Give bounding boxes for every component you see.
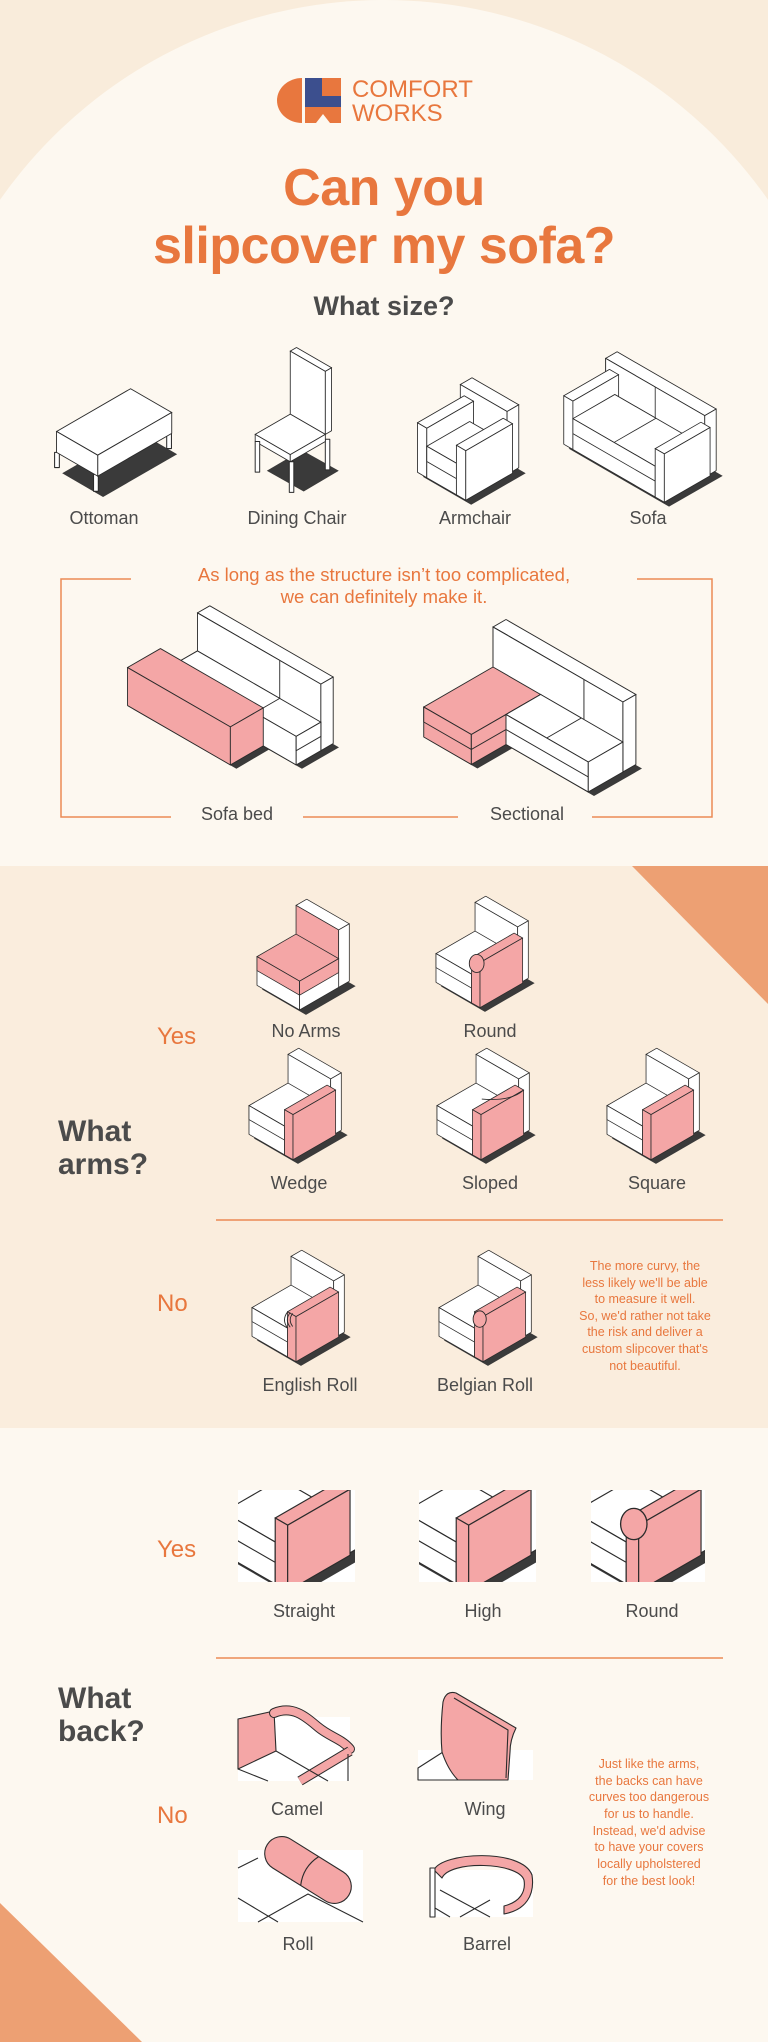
labels: no arms, round: No Arms [271,1021,341,1041]
note: curvy arms: the risk and deliver a [587,1325,703,1339]
note: curvy backs: for the best look! [603,1874,695,1888]
icon: armchair [417,378,526,505]
note: curvy backs: for us to handle. [604,1807,694,1821]
icon: dining chair [255,348,339,492]
labels: sizes: Sofa [629,508,668,528]
icon: camel back [238,1710,350,1781]
callout text [198,564,570,607]
heading: what arms: arms? [58,1148,148,1181]
icon: english roll [252,1250,351,1366]
note: curvy backs: Instead, we'd advise [593,1824,705,1838]
icon: round arm [436,896,535,1012]
note: curvy backs: the backs can have [595,1774,703,1788]
logo: COMFORT [352,76,473,103]
icon: straight back [238,1490,355,1582]
heading: what arms: What [58,1115,131,1148]
labels: sofa bed & sectional [201,804,564,824]
note: curvy arms: So, we'd rather not take [579,1309,711,1323]
labels: english roll, belgian roll [262,1375,533,1395]
heading: what back: What [58,1682,131,1715]
background: back section [0,1428,768,2042]
labels: english roll, belgian roll: English Roll [262,1375,358,1395]
note: curvy backs: to have your covers [594,1840,704,1854]
icon: ottoman [55,389,177,497]
heading: what size: What size? [313,291,455,321]
icon: sofa bed [128,606,339,769]
logo [277,76,473,127]
icon: sloped arm [437,1048,536,1164]
labels: sofa bed & sectional: Sectional [490,804,564,824]
icon: sofa [564,352,723,507]
labels: roll, barrel: Barrel [463,1934,511,1954]
labels: sizes: Armchair [439,508,511,528]
labels: straight, high, round: High [464,1601,502,1621]
labels: wedge, sloped, square [271,1173,686,1193]
label: back no: No [157,1802,188,1829]
labels: wedge, sloped, square: Square [628,1173,686,1193]
icon: square arm [607,1048,706,1164]
title: slipcover my sofa? [153,217,615,275]
heading: what back [58,1682,145,1748]
labels: sizes: Ottoman [69,508,139,528]
labels: straight, high, round: Straight [273,1601,335,1621]
label: back yes: Yes [157,1536,196,1563]
note: curvy arms [579,1259,711,1373]
labels: straight, high, round: Round [625,1601,679,1621]
icon: roll back [238,1830,363,1922]
labels: wedge, sloped, square: Wedge [271,1173,327,1193]
labels: no arms, round: Round [463,1021,517,1041]
labels: camel, wing [271,1799,506,1819]
heading: what back: back? [58,1715,145,1748]
labels: sizes: Dining Chair [247,508,347,528]
labels: no arms, round [271,1021,517,1041]
label: arms no: No [157,1290,188,1317]
note: curvy backs: curves too dangerous [589,1790,709,1804]
note: curvy backs: locally upholstered [597,1857,701,1871]
note: curvy arms: The more curvy, the [590,1259,700,1273]
note: curvy arms: to measure it well. [595,1292,695,1306]
label: arms yes: Yes [157,1023,196,1050]
labels: roll, barrel [282,1934,511,1954]
labels: wedge, sloped, square: Sloped [462,1173,518,1193]
icon: barrel back [430,1856,533,1917]
note: curvy backs [589,1757,709,1888]
labels: straight, high, round [273,1601,679,1621]
icon: wing back [418,1692,533,1780]
callout text: As long as the structure isn’t too complicated, [198,564,570,585]
labels: sofa bed & sectional: Sofa bed [201,804,273,824]
note: curvy backs: Just like the arms, [599,1757,699,1771]
labels: camel, wing: Wing [464,1799,506,1819]
heading: what arms [58,1115,148,1181]
icon: round back [591,1490,705,1582]
labels: roll, barrel: Roll [282,1934,314,1954]
icon: wedge arm [249,1048,348,1164]
icon: high back [419,1490,536,1582]
labels: camel, wing: Camel [271,1799,323,1819]
background: top section [0,0,768,938]
background: arms section [0,866,768,1428]
labels: english roll, belgian roll: Belgian Roll [437,1375,533,1395]
note: curvy arms: custom slipcover that's [582,1342,708,1356]
note: curvy arms: not beautiful. [609,1359,681,1373]
frame: complicated structures [61,579,712,817]
logo: WORKS [352,100,443,127]
callout text: we can definitely make it. [280,586,487,607]
icon: no arms [257,899,356,1015]
note: curvy arms: less likely we'll be able [582,1276,708,1290]
icon: belgian roll [439,1250,538,1366]
icon: sectional [424,620,642,796]
labels: sizes [69,508,668,528]
title: Can you [283,159,485,217]
title [153,159,615,275]
